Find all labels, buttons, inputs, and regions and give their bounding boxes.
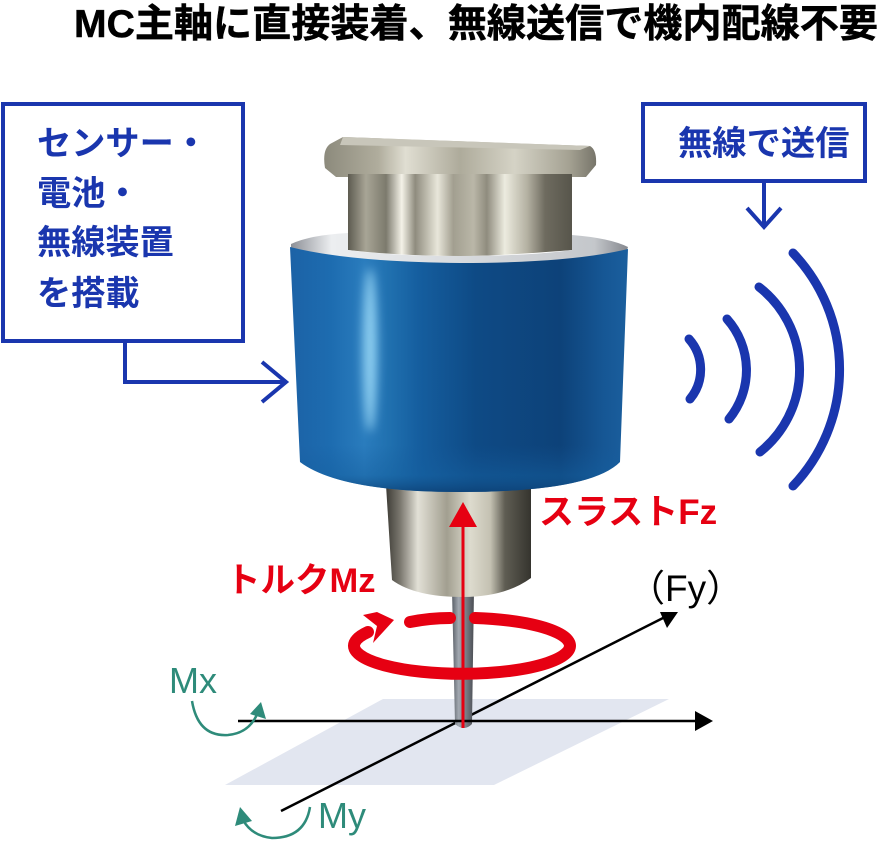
label: Mx: Mx [169,660,217,701]
callout text: sensor, battery, radio: センサー・ [37,125,208,163]
label: Fy: （Fy） [628,568,743,609]
arrow: callout to sensor body [125,341,286,402]
neck [348,174,572,256]
callout text: sensor, battery, radio [37,125,208,313]
torque ring arrowhead [363,612,394,643]
axis: Fy arrowhead [660,612,678,628]
lower cylinder [386,485,531,597]
label: thrust Fz: スラストFz [539,493,717,532]
arrow: wireless callout down [747,181,781,227]
blue body rim shading [300,445,620,492]
arrow: thrust Fz [449,502,477,728]
axis: Fx [238,711,713,731]
torque ring [354,618,570,674]
panel: sensor callout [3,104,243,341]
panel: wireless callout [643,104,865,181]
callout text: sensor, battery, radio: 電池・ [37,175,140,213]
blue cylinder body [290,247,628,492]
flange [324,137,596,177]
callout text: wireless transmission: 無線で送信 [678,125,850,163]
tool shank [452,590,474,728]
callout text: sensor, battery, radio: を搭載 [37,275,140,313]
label: torque Mz: トルクMz [226,562,376,600]
icon: radio waves [689,253,840,486]
work plane [225,699,669,785]
blue body top disc [291,233,628,264]
label: My: My [318,795,366,836]
axis: Fy back part [281,617,665,811]
title: MC主軸に直接装着、無線送信で機内配線不要 [74,3,878,46]
callout text: sensor, battery, radio: 無線装置 [37,224,174,262]
sensor photo: spindle holder [290,137,628,728]
flange top face [340,137,590,150]
icon: My rotation arrow [235,807,310,838]
icon: Mx rotation arrow [192,701,266,735]
blue body highlight [363,268,377,432]
